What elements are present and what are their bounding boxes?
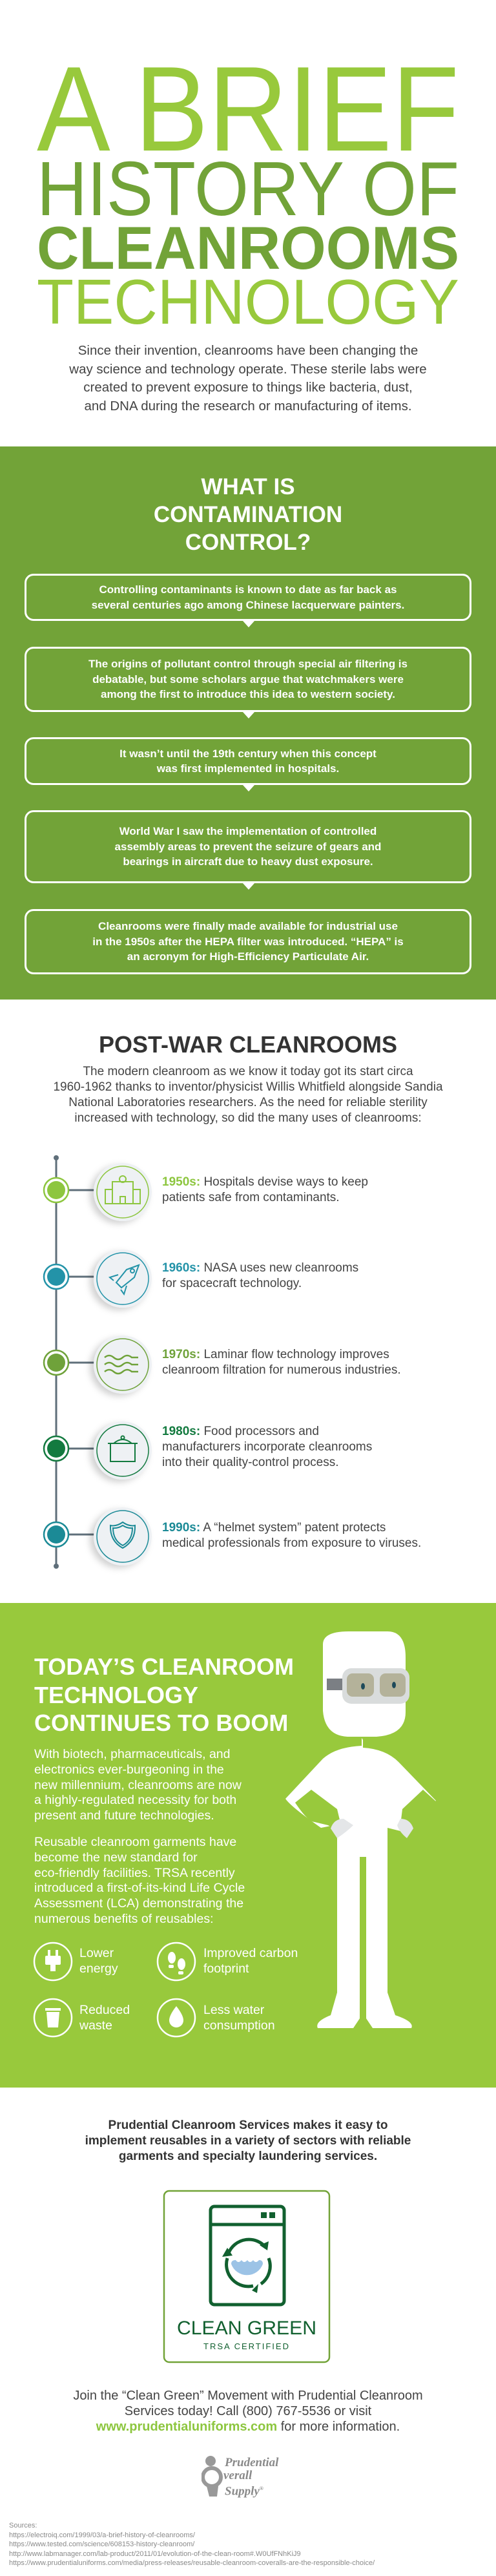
figure: cleanroom worker — [285, 1631, 436, 2028]
heading: CONTROL? — [185, 530, 311, 555]
closing statement: Prudential Cleanroom Services makes it easy to — [108, 2119, 388, 2132]
closing statement: implement reusables in a variety of sectors with reliable — [85, 2134, 411, 2148]
intro text: created to prevent exposure to things like bacteria, dust, — [83, 380, 413, 395]
paragraph 1: a highly-regulated necessity for both — [34, 1793, 236, 1807]
box 4: bearings in aircraft due to heavy dust exposure. — [123, 855, 373, 868]
paragraph 2: numerous benefits of reusables: — [34, 1912, 213, 1926]
box 5: Cleanrooms were finally made available for industrial use — [98, 920, 398, 932]
timeline text 1970s — [162, 1348, 401, 1377]
sources: http://www.labmanager.com/lab-product/2011/01/evolution-of-the-clean-room#.W0UfFNhKiJ9 — [9, 2550, 301, 2557]
box 3: was first implemented in hospitals. — [157, 762, 339, 775]
paragraph 1: With biotech, pharmaceuticals, and — [34, 1747, 230, 1761]
intro text: Since their invention, cleanrooms have been changing the — [78, 343, 418, 358]
post-war text: increased with technology, so did the many uses of cleanrooms: — [74, 1111, 422, 1125]
label: lower energy — [79, 1946, 118, 1976]
label: reduced waste: waste — [79, 2018, 112, 2033]
heading: CONTINUES TO BOOM — [34, 1710, 288, 1736]
node 1990s — [44, 1507, 152, 1565]
paragraph 1: present and future technologies. — [34, 1808, 214, 1823]
heading — [154, 474, 342, 555]
box 3 — [25, 737, 471, 785]
label: less water: Less water — [203, 2003, 264, 2017]
timeline text 1980s: manufacturers incorporate cleanrooms — [162, 1440, 372, 1454]
box 4: World War I saw the implementation of controlled — [119, 825, 377, 837]
timeline text 1980s: 1980s: Food processors and — [162, 1425, 319, 1438]
heading: TECHNOLOGY — [34, 1681, 198, 1708]
box 2 — [25, 647, 471, 712]
benefit icons — [34, 1942, 196, 2038]
sources: https://electroiq.com/1999/03/a-brief-history-of-cleanrooms/ — [9, 2531, 195, 2539]
timeline text 1990s: 1990s: A “helmet system” patent protects — [162, 1521, 386, 1534]
box 5: in the 1950s after the HEPA filter was introduced. “HEPA” is — [92, 936, 404, 948]
paragraph 2: eco-friendly facilities. TRSA recently — [34, 1866, 235, 1880]
timeline text 1980s: into their quality-control process. — [162, 1456, 339, 1469]
box 2: debatable, but some scholars argue that watchmakers were — [92, 673, 404, 686]
timeline text 1990s — [162, 1521, 421, 1550]
timeline text 1950s — [162, 1175, 368, 1204]
closing statement: garments and specialty laundering services. — [119, 2150, 377, 2163]
box 2: among the first to introduce this idea to western society. — [101, 688, 395, 700]
label: lower energy: energy — [79, 1962, 118, 1976]
paragraph 1: electronics ever-burgeoning in the — [34, 1763, 224, 1777]
panel: today's cleanroom technology — [0, 1603, 496, 2088]
post-war text — [53, 1065, 443, 1125]
intro text: and DNA during the research or manufacturing of items. — [84, 398, 412, 414]
heading: post-war cleanrooms: POST-WAR CLEANROOMS — [99, 1031, 397, 1058]
logo: clean green — [163, 2190, 331, 2363]
logo: prudential overall supply: Supply® — [225, 2484, 264, 2498]
paragraph 2 — [34, 1835, 245, 1926]
timeline text 1980s — [162, 1425, 372, 1469]
box 4 — [25, 810, 471, 883]
label: carbon footprint: footprint — [203, 1962, 249, 1976]
sources — [9, 2522, 375, 2567]
intro text: way science and technology operate. These sterile labs were — [69, 362, 427, 376]
node 1960s — [44, 1250, 152, 1308]
post-war text: The modern cleanroom as we know it today got its start circa — [83, 1065, 413, 1078]
box 2: The origins of pollutant control through special air filtering is — [88, 658, 408, 670]
label: carbon footprint — [203, 1946, 298, 1976]
timeline text 1990s: medical professionals from exposure to viruses. — [162, 1536, 421, 1550]
box 1: Controlling contaminants is known to date as far back as — [99, 583, 397, 596]
paragraph 2: Assessment (LCA) demonstrating the — [34, 1896, 243, 1911]
box 1: several centuries ago among Chinese lacquerware painters. — [92, 598, 404, 611]
paragraph 2: Reusable cleanroom garments have — [34, 1835, 236, 1849]
logo: clean green: CLEAN GREEN — [177, 2318, 316, 2339]
paragraph 1: new millennium, cleanrooms are now — [34, 1778, 242, 1792]
sources: https://www.tested.com/science/608153-history-cleanroom/ — [9, 2540, 194, 2548]
call to action: Services today! Call (800) 767-5536 or visit — [125, 2404, 371, 2418]
paragraph 2: become the new standard for — [34, 1850, 198, 1865]
call to action: Join the “Clean Green” Movement with Prudential Cleanroom — [73, 2389, 423, 2403]
label: lower energy: Lower — [79, 1946, 114, 1960]
post-war text: National Laboratories researchers. As the need for reliable sterility — [68, 1096, 428, 1109]
sources: https://www.prudentialuniforms.com/media/press-releases/reusable-cleanroom-coveralls-are-the-responsible-choice/ — [9, 2559, 375, 2567]
node 1980s — [44, 1421, 152, 1480]
box 5 — [25, 909, 471, 974]
logo: prudential overall supply — [202, 2456, 279, 2498]
call to action — [73, 2389, 423, 2434]
node 1970s — [44, 1335, 152, 1394]
title: HISTORY OF — [37, 146, 459, 232]
title: CLEANROOMS — [37, 214, 459, 282]
timeline text 1960s — [162, 1261, 358, 1290]
title: TECHNOLOGY — [37, 266, 459, 336]
timeline text 1950s: 1950s: Hospitals devise ways to keep — [162, 1175, 368, 1189]
sources: Sources: — [9, 2522, 37, 2529]
panel: contamination control — [0, 446, 496, 1000]
box 5: an acronym for High-Efficiency Particulate Air. — [127, 950, 369, 963]
label: less water: consumption — [203, 2018, 275, 2033]
box 3: It wasn’t until the 19th century when this concept — [119, 747, 377, 760]
timeline text 1960s: 1960s: NASA uses new cleanrooms — [162, 1261, 358, 1275]
heading: TODAY’S CLEANROOM — [34, 1653, 294, 1680]
title: A BRIEF — [37, 41, 459, 176]
intro text — [69, 343, 427, 414]
timeline text 1950s: patients safe from contaminants. — [162, 1191, 340, 1204]
label: reduced waste — [79, 2003, 130, 2033]
timeline text 1970s: 1970s: Laminar flow technology improves — [162, 1348, 389, 1361]
box 1 — [25, 574, 471, 621]
paragraph 1 — [34, 1747, 242, 1823]
call to action: www.prudentialuniforms.com for more information. — [96, 2420, 400, 2434]
timeline — [43, 1155, 152, 1571]
heading — [34, 1653, 294, 1736]
node 1950s — [44, 1163, 152, 1221]
heading: WHAT IS — [201, 474, 295, 499]
label: reduced waste: Reduced — [79, 2003, 130, 2017]
closing statement — [85, 2119, 411, 2163]
timeline text 1960s: for spacecraft technology. — [162, 1277, 302, 1290]
logo: prudential overall supply: Prudential — [225, 2456, 278, 2469]
paragraph 2: introduced a first-of-its-kind Life Cycle — [34, 1881, 245, 1895]
logo: prudential overall supply: verall — [223, 2469, 252, 2482]
title — [37, 41, 459, 336]
label: carbon footprint: Improved carbon — [203, 1946, 298, 1960]
label: less water — [203, 2003, 275, 2033]
box 4: assembly areas to prevent the seizure of gears and — [115, 841, 381, 853]
heading: CONTAMINATION — [154, 502, 342, 527]
post-war text: 1960-1962 thanks to inventor/physicist Willis Whitfield alongside Sandia — [53, 1080, 443, 1094]
logo: clean green: TRSA CERTIFIED — [203, 2341, 290, 2351]
timeline text 1970s: cleanroom filtration for numerous industries. — [162, 1363, 401, 1377]
